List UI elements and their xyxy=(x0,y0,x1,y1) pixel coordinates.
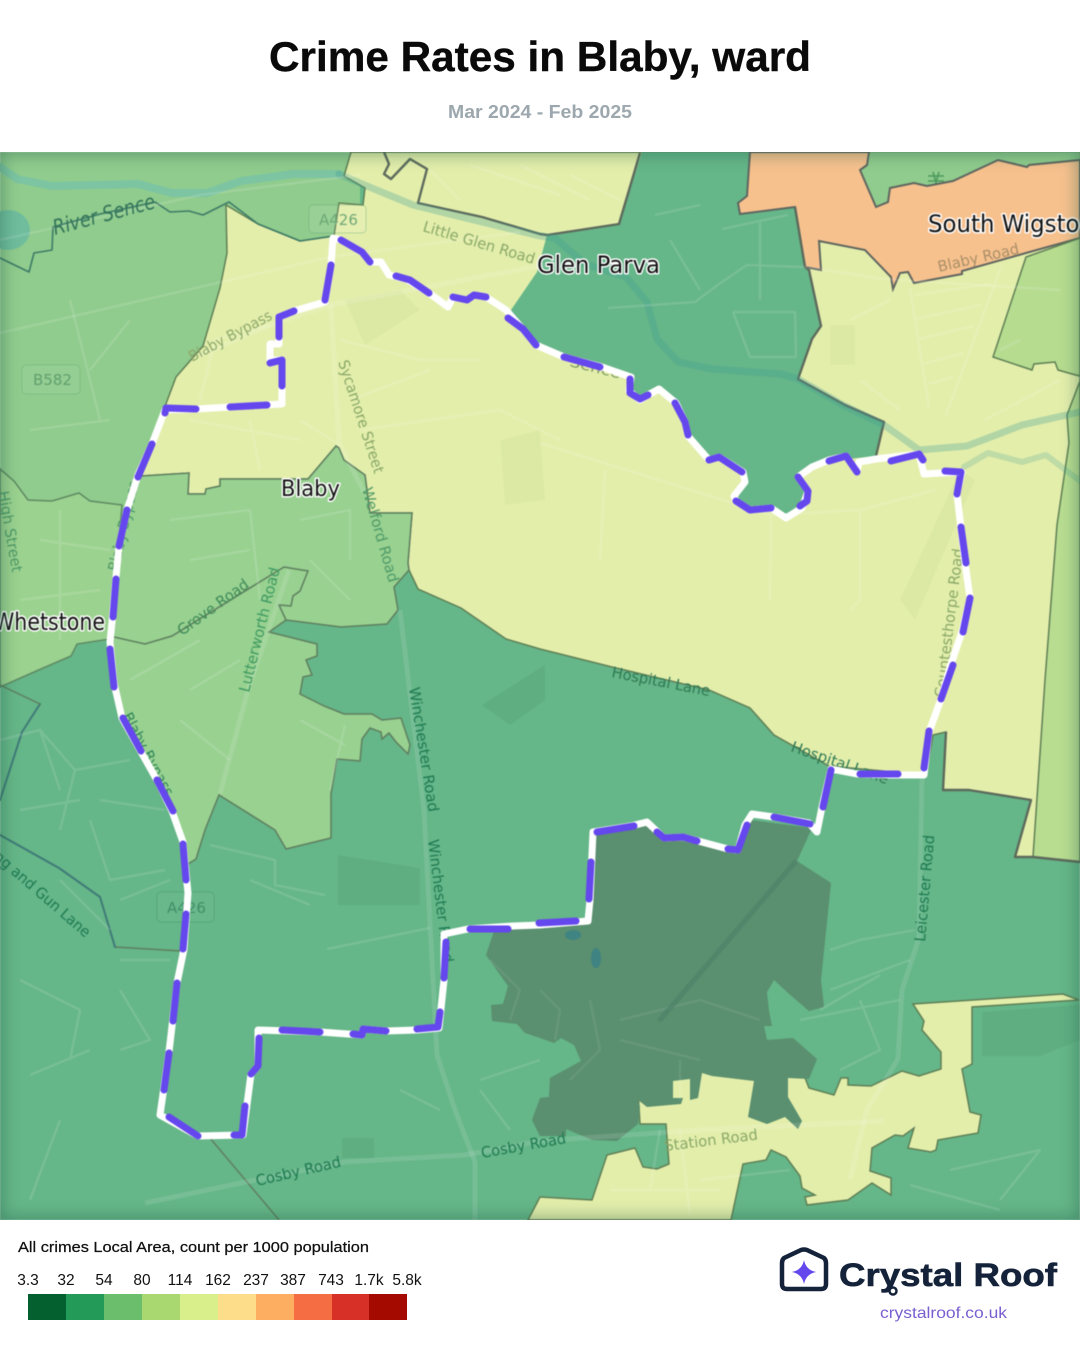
road badge: A426 south: A426 xyxy=(167,899,206,917)
logo y key hook xyxy=(890,1288,896,1294)
road label: Welford Road: Welford Road xyxy=(358,485,402,584)
river: lake xyxy=(0,210,30,250)
legend colour bar xyxy=(28,1294,407,1320)
region: east light green patch xyxy=(993,238,1080,376)
place label: Blaby: Blaby xyxy=(281,477,340,502)
legend scale labels: 5.8k xyxy=(392,1272,422,1289)
region: South Wigston orange xyxy=(738,152,1080,289)
road label: Blaby Bypass north: Blaby Bypass xyxy=(185,306,275,366)
road label: Sence fragment: Sence xyxy=(568,352,623,382)
thin boundary lines xyxy=(114,567,308,1220)
road label: Grove Road: Grove Road xyxy=(174,575,252,639)
road label: Lutterworth Road: Lutterworth Road xyxy=(235,565,284,694)
region: Blaby centre light green xyxy=(110,446,412,864)
yellow field patches xyxy=(345,290,975,620)
main roads xyxy=(145,262,922,1220)
road label: Blaby Bypass south: Blaby Bypass xyxy=(118,709,178,799)
legend scale labels: 237 xyxy=(243,1272,269,1289)
icon: railway station xyxy=(928,172,944,186)
icon: house with star xyxy=(782,1250,826,1289)
darker fields and patches xyxy=(338,665,1080,1158)
region: south yellow area xyxy=(528,994,1079,1220)
river: main water channel xyxy=(0,167,1080,947)
region: north-west light green area xyxy=(0,152,360,515)
road label: River Sence: River Sence xyxy=(50,189,158,240)
road label: Cosby Road west: Cosby Road xyxy=(254,1153,343,1190)
region: darkest ward section xyxy=(486,820,831,1141)
road label: Station Road: Station Road xyxy=(663,1126,759,1155)
road label: Winchester Road north: Winchester Road xyxy=(405,686,443,813)
road label: Little Glen Road: Little Glen Road xyxy=(421,218,537,268)
website url: crystalroof.co.uk xyxy=(880,1305,1008,1322)
region: north-east light green patch xyxy=(861,152,1080,206)
subtitle: date range: Mar 2024 - Feb 2025 xyxy=(448,102,632,122)
region: east strip light green xyxy=(1033,381,1080,862)
region: Whetstone area xyxy=(0,469,122,687)
logo: Crystal Roof xyxy=(782,1250,1057,1322)
road badge: B582 xyxy=(22,365,80,394)
logo wordmark: Crystal Roof xyxy=(839,1257,1057,1293)
road label: Countesthorpe Road: Countesthorpe Road xyxy=(931,547,967,698)
ponds xyxy=(565,930,601,968)
region: Blaby ward yellow area xyxy=(138,152,1080,862)
road badge: A426 north xyxy=(309,205,366,233)
legend scale labels: 80 xyxy=(133,1272,151,1289)
legend scale labels: 32 xyxy=(57,1272,75,1289)
streets in darkest section xyxy=(490,960,760,1100)
legend scale labels: 54 xyxy=(95,1272,113,1289)
thick boundary lines xyxy=(384,152,1080,862)
local street network xyxy=(0,165,1060,1215)
legend scale labels: 162 xyxy=(205,1272,231,1289)
legend title: All crimes Local Area, count per 1000 population xyxy=(18,1239,369,1256)
legend scale labels: 114 xyxy=(168,1272,193,1289)
region: Glen Parva green xyxy=(511,152,884,518)
road label: Blaby Bypass west: Blaby Bypass xyxy=(104,479,143,573)
legend scale labels: 387 xyxy=(280,1272,306,1289)
road badge: B582: B582 xyxy=(33,371,72,389)
road label: Hospital Lane east: Hospital Lane xyxy=(789,738,891,788)
road label: Winchester Road south: Winchester Road xyxy=(424,838,457,964)
road label: Hospital Lane west: Hospital Lane xyxy=(610,663,712,700)
railway line xyxy=(659,861,796,1021)
road label: Cosby Road east: Cosby Road xyxy=(480,1129,567,1162)
road label: Leicester Road: Leicester Road xyxy=(911,834,938,942)
legend xyxy=(17,1239,422,1320)
legend scale labels xyxy=(17,1272,422,1289)
road label: Blaby Road: Blaby Road xyxy=(936,240,1021,276)
legend scale labels: 1.7k xyxy=(354,1272,384,1289)
legend scale labels: 3.3 xyxy=(17,1272,39,1289)
legend scale labels: 743 xyxy=(318,1272,344,1289)
ward boundary: white base and purple dashes xyxy=(110,238,970,1136)
road label: Sycamore Street: Sycamore Street xyxy=(334,358,388,476)
panel: choropleth map xyxy=(0,152,1080,1220)
road badge: A426 south xyxy=(157,892,214,922)
title: Crime Rates in Blaby, ward xyxy=(269,33,811,80)
road badge: A426 north: A426 xyxy=(319,211,358,229)
place label: Glen Parva: Glen Parva xyxy=(537,251,660,279)
